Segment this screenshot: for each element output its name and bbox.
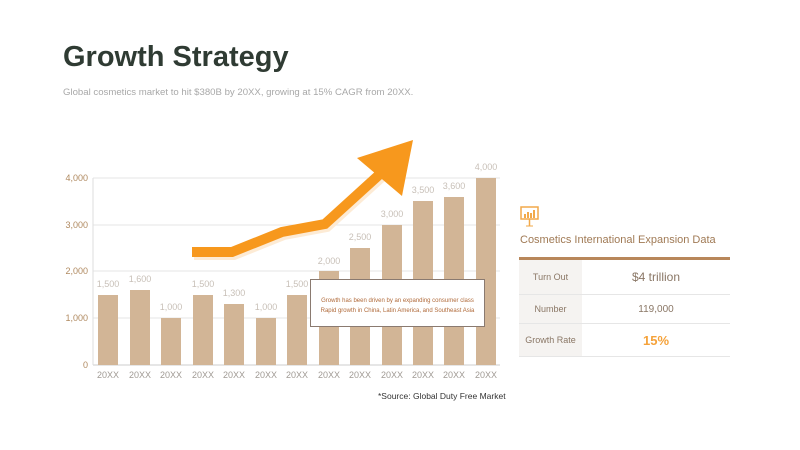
- title: Growth Strategy: [63, 41, 289, 73]
- bar chart: 20XX: [97, 370, 119, 380]
- bar chart: 20XX: [129, 370, 151, 380]
- bar chart: 3,600: [443, 181, 465, 191]
- bar chart: 4,000: [65, 173, 88, 183]
- bar chart: 20XX: [160, 370, 182, 380]
- data table: [519, 257, 730, 357]
- bar chart: 0: [83, 360, 88, 370]
- bar chart: 2,000: [318, 256, 340, 266]
- callout: Rapid growth in China, Latin America, and Southeast Asia: [321, 308, 474, 314]
- bar chart: 1,000: [65, 313, 88, 323]
- bar chart: 1,300: [223, 288, 245, 298]
- data table: Growth Rate: [525, 335, 576, 345]
- bar chart: 20XX: [475, 370, 497, 380]
- bar chart: 1,000: [160, 302, 182, 312]
- bar chart: 2,000: [65, 266, 88, 276]
- bar chart: 4,000: [475, 162, 497, 172]
- bar chart: 20XX: [443, 370, 465, 380]
- bar chart: 2,500: [349, 232, 371, 242]
- data table: Turn Out: [533, 272, 568, 282]
- icon: presentation chart: [520, 206, 539, 226]
- bar chart: 20XX: [223, 370, 245, 380]
- bar chart: 1,500: [286, 279, 308, 289]
- bar chart: 1,500: [97, 279, 119, 289]
- subtitle: Global cosmetics market to hit $380B by 20XX, growing at 15% CAGR from 20XX.: [63, 87, 413, 98]
- callout: Growth has been driven by an expanding consumer class: [321, 298, 474, 304]
- data table: $4 trillion: [632, 270, 680, 284]
- data table: Number: [534, 304, 566, 314]
- bar chart: 20XX: [318, 370, 340, 380]
- bar chart: 20XX: [349, 370, 371, 380]
- bar chart: 1,500: [192, 279, 214, 289]
- table heading: Cosmetics International Expansion Data: [520, 234, 716, 246]
- bar chart: 20XX: [255, 370, 277, 380]
- bar chart: 1,600: [129, 274, 151, 284]
- data table: 119,000: [638, 304, 674, 314]
- source note: *Source: Global Duty Free Market: [378, 391, 506, 401]
- callout: [310, 279, 485, 327]
- bar chart: 3,500: [412, 185, 434, 195]
- bar chart: 1,000: [255, 302, 277, 312]
- bar chart: 20XX: [286, 370, 308, 380]
- bar chart: 20XX: [381, 370, 403, 380]
- data table: 15%: [643, 332, 669, 348]
- bar chart: 3,000: [381, 209, 403, 219]
- bar chart: 3,000: [65, 220, 88, 230]
- bar chart: 20XX: [192, 370, 214, 380]
- bar chart: 20XX: [412, 370, 434, 380]
